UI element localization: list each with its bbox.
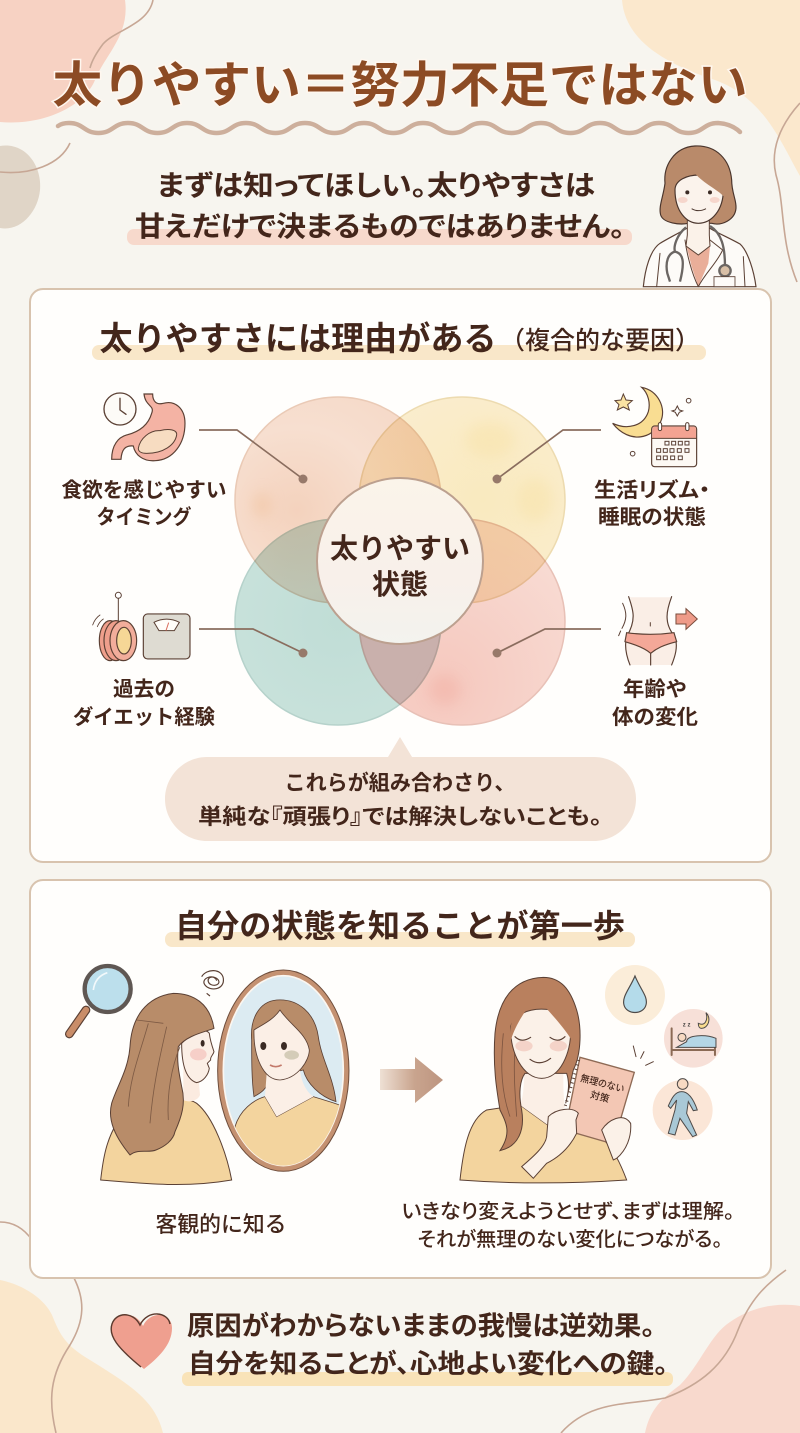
label: lifestyle and sleep: 生活リズム・ <box>594 478 710 502</box>
facial features <box>515 1037 567 1063</box>
reflection <box>235 1000 343 1177</box>
panel background <box>30 289 771 862</box>
mirror glass <box>223 976 343 1166</box>
panel heading highlight <box>92 345 706 360</box>
icon: moon and calendar <box>613 387 697 467</box>
centre label: 状態 <box>372 569 428 600</box>
label: lifestyle and sleep <box>594 478 710 529</box>
panel heading note: （複合的な要因） <box>500 327 700 355</box>
label: age and body changes: 体の変化 <box>612 706 699 729</box>
callout: 単純な『頑張り』では解決しないことも。 <box>198 805 602 829</box>
callout: これらが組み合わさり、 <box>284 771 516 795</box>
icon: waist and arrow <box>619 597 697 665</box>
closing message <box>182 1311 673 1386</box>
illustration: smiling woman with notebook <box>460 965 723 1183</box>
leader lines <box>199 430 601 658</box>
intro line 2: 甘えだけで決まるものではありません。 <box>135 211 625 242</box>
circle: top right <box>359 397 565 603</box>
label: past diets <box>73 678 215 729</box>
stethoscope <box>667 226 731 282</box>
arrow <box>380 1057 443 1103</box>
label: past diets: ダイエット経験 <box>73 705 215 729</box>
panel heading highlight <box>165 932 635 947</box>
centre circle <box>317 478 483 644</box>
panel heading: 太りやすさには理由がある <box>100 320 496 357</box>
centre label <box>330 533 470 600</box>
neck <box>520 1073 565 1127</box>
illustration: woman at mirror <box>69 966 349 1185</box>
title: 太りやすい＝努力不足ではない <box>52 59 748 113</box>
fringe <box>675 153 724 197</box>
centre label: 太りやすい <box>330 533 470 564</box>
watercolor blotches <box>253 422 553 705</box>
hair <box>494 977 580 1151</box>
venn diagram <box>235 397 565 725</box>
closing line 2: 自分を知ることが、心地よい変化への鍵。 <box>188 1349 668 1379</box>
circle: bottom right <box>359 519 565 725</box>
doctor illustration <box>643 146 756 287</box>
icon: heart <box>111 1314 172 1369</box>
title wavy underline <box>58 123 740 133</box>
circle: bottom left <box>235 519 441 725</box>
eyes and smile <box>678 190 720 211</box>
hands <box>522 1109 578 1178</box>
health icons: z z <box>683 1023 690 1029</box>
fringe <box>510 992 572 1043</box>
magnifying glass <box>69 966 131 1034</box>
closing highlight <box>182 1372 673 1386</box>
coat lapels <box>657 240 745 287</box>
panel background <box>30 880 771 1278</box>
label: age and body changes <box>612 678 699 729</box>
panel heading: 自分の状態を知ることが第一歩 <box>175 908 625 944</box>
panel: causes <box>30 289 771 862</box>
panel: know yourself <box>30 880 771 1278</box>
label: appetite timing: タイミング <box>96 505 192 529</box>
caption: understand first: それが無理のない変化につながる。 <box>418 1228 722 1251</box>
label: past diets: 過去の <box>113 678 175 701</box>
circle: top left <box>235 397 441 603</box>
callout <box>165 737 636 841</box>
neck <box>686 218 710 255</box>
label: age and body changes: 年齢や <box>623 678 687 701</box>
health icons <box>605 965 723 1140</box>
label: appetite timing <box>62 478 226 529</box>
face <box>675 175 723 223</box>
face <box>511 1009 571 1078</box>
label: lifestyle and sleep: 睡眠の状態 <box>598 506 706 529</box>
overlap: bottom lens <box>359 540 441 704</box>
neck <box>183 1060 200 1101</box>
inner shirt <box>687 247 710 287</box>
hair <box>110 993 214 1155</box>
mirror frame <box>218 970 349 1171</box>
closing line 1: 原因がわからないままの我慢は逆効果。 <box>187 1311 655 1341</box>
coat pocket <box>714 277 735 287</box>
notebook <box>565 1057 634 1144</box>
face profile <box>182 1031 214 1083</box>
notebook: 無理のない <box>579 1072 626 1095</box>
worry scribble <box>202 971 223 996</box>
label: appetite timing: 食欲を感じやすい <box>62 478 226 502</box>
intro line 1: まずは知ってほしい。太りやすさは <box>157 170 595 201</box>
cheek and eye <box>190 1040 207 1060</box>
hair back <box>660 146 736 224</box>
intro highlight <box>127 229 632 245</box>
caption: know objectively: 客観的に知る <box>156 1212 286 1237</box>
coat <box>643 228 756 287</box>
notebook: 対策 <box>589 1089 611 1105</box>
intro text <box>127 170 632 245</box>
caption: understand first <box>402 1200 734 1251</box>
sweater back <box>101 1099 232 1185</box>
sweater <box>460 1105 627 1183</box>
icon: clock and stomach <box>104 393 185 461</box>
icon: yo-yo and scale <box>93 592 190 661</box>
caption: understand first: いきなり変えようとせず、まずは理解。 <box>402 1200 734 1223</box>
